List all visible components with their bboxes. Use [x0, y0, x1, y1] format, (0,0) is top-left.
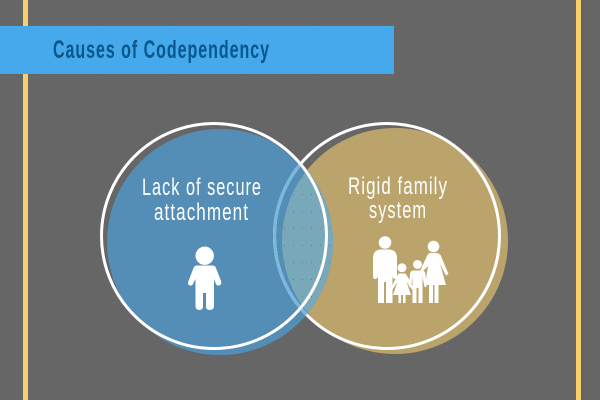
icon: family: [373, 236, 448, 303]
father: [373, 236, 397, 303]
icon: child: [188, 246, 221, 310]
girl: [391, 263, 414, 303]
label: rigid family system: system: [369, 197, 427, 224]
ring: blue-tinted part of tan outline: [273, 164, 308, 316]
title: Causes of Codependency: [53, 36, 270, 64]
mother: [420, 241, 448, 303]
boy: [409, 260, 426, 303]
label: rigid family system: Rigid family: [348, 173, 448, 200]
label: lack of secure attachment: [142, 174, 262, 226]
ring: tan circle outline: [274, 124, 500, 348]
ring: blue circle outline: [102, 124, 326, 348]
overlap region: [282, 170, 333, 313]
circle: rigid family system fill: [282, 128, 508, 354]
right yellow bar: [576, 0, 581, 400]
label: lack of secure attachment: Lack of secure: [142, 174, 262, 201]
left yellow bar: [23, 0, 28, 400]
label: rigid family system: [348, 173, 448, 224]
circle: lack of secure attachment fill: [107, 129, 333, 355]
title banner: [0, 26, 394, 74]
label: lack of secure attachment: attachment: [154, 199, 249, 226]
venn diagram: [102, 124, 508, 355]
